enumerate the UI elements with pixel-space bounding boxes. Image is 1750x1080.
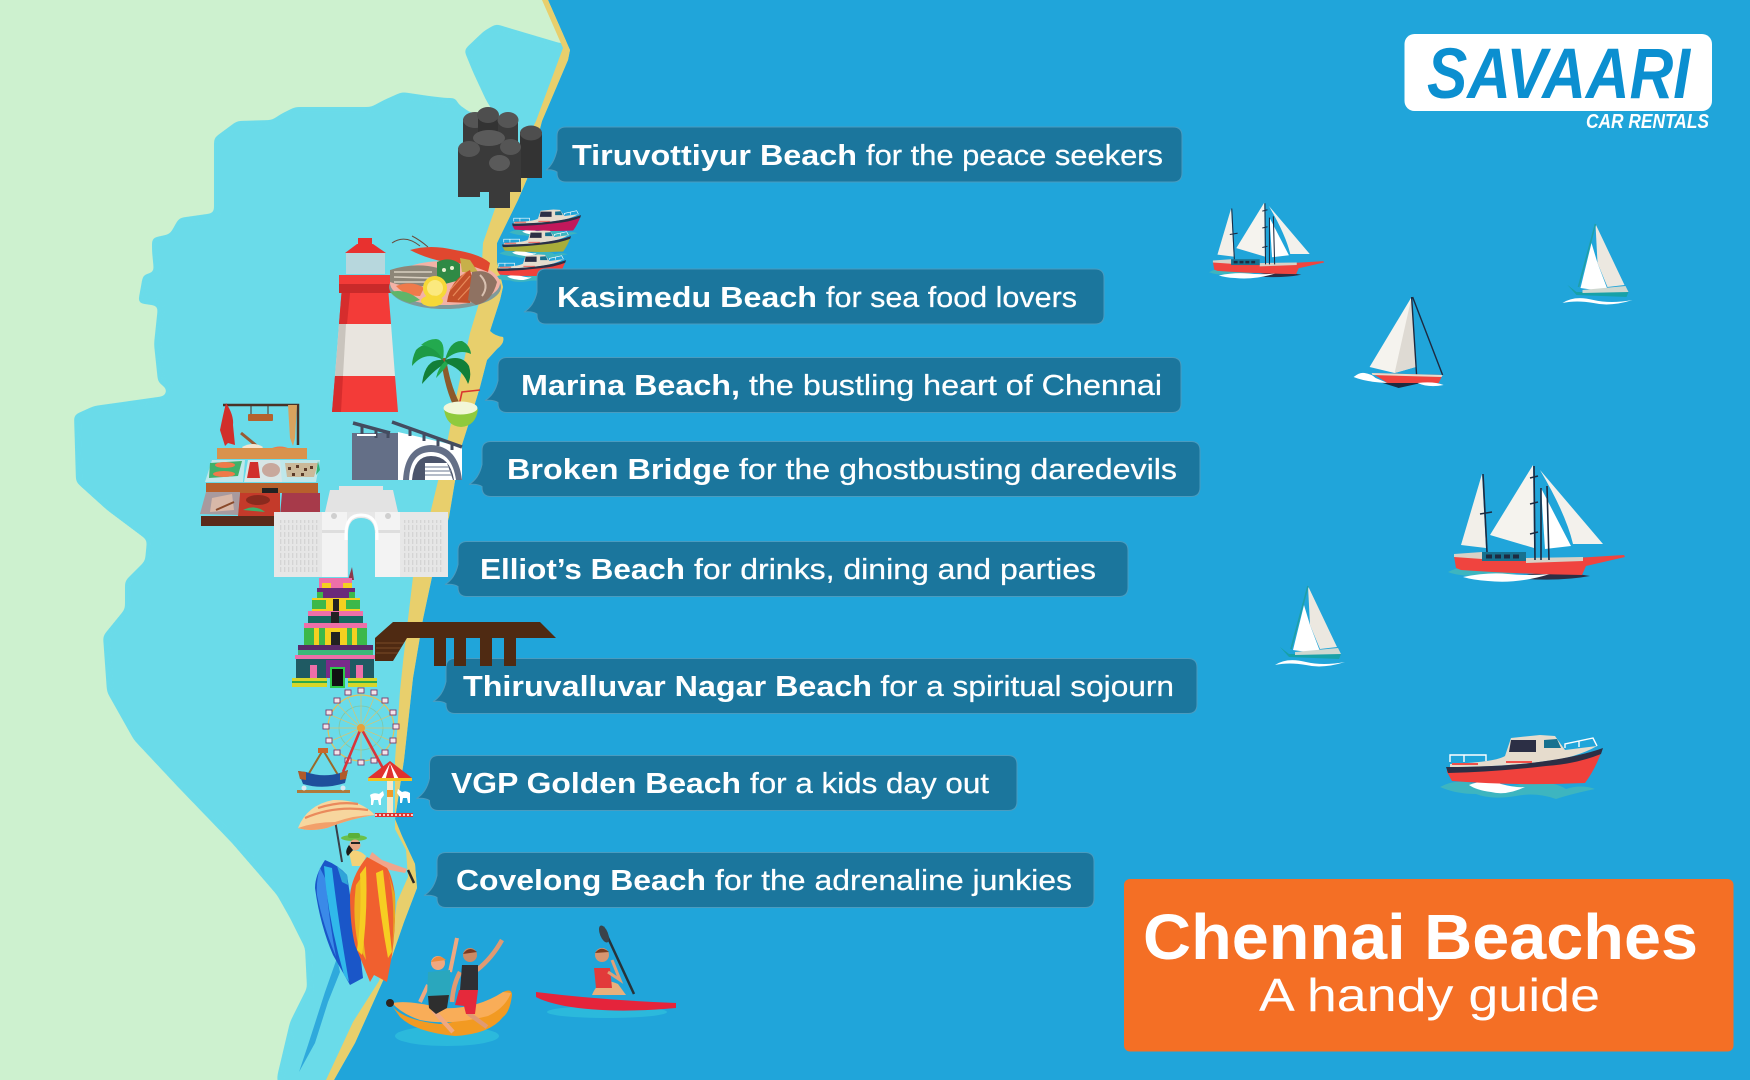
heading: Chennai Beaches xyxy=(1143,901,1698,973)
logo: Savaari car rentals: SAVAARI xyxy=(1427,35,1691,114)
callouts xyxy=(416,127,1200,908)
map: inland water sliver xyxy=(299,958,340,1072)
label: Broken Bridge: Broken Bridge xyxy=(507,454,730,486)
icon: broken bridge xyxy=(352,422,462,480)
title panel xyxy=(1124,879,1734,1052)
map: land xyxy=(0,0,575,1080)
icon: pirate ship ride xyxy=(297,748,350,793)
label: VGP Golden Beach: VGP Golden Beach xyxy=(451,768,741,800)
icon: sailing boat top xyxy=(1209,203,1324,278)
icon: three fishing boats xyxy=(494,209,581,283)
label: Marina Beach: the bustling heart of Chennai xyxy=(749,370,1162,402)
icon: surfboards xyxy=(315,857,395,985)
label: Thiruvalluvar Nagar Beach: for a spiritual sojourn xyxy=(880,671,1174,703)
label: Tiruvottiyur Beach: Tiruvottiyur Beach xyxy=(572,140,857,172)
icon: wooden pier xyxy=(375,622,556,666)
icon: sloop top right xyxy=(1562,224,1632,304)
label: Tiruvottiyur Beach xyxy=(546,127,1182,182)
icon: carousel xyxy=(368,761,413,817)
label: Elliot's Beach: for drinks, dining and parties xyxy=(694,554,1096,586)
label: Marina Beach xyxy=(485,358,1181,412)
label: Elliot's Beach: Elliot’s Beach xyxy=(480,554,685,586)
label: Covelong Beach: for the adrenaline junkies xyxy=(715,865,1072,897)
label: Kasimedu Beach xyxy=(524,269,1104,324)
logo: Savaari car rentals: CAR RENTALS xyxy=(1586,111,1710,133)
icon: motor boat xyxy=(1440,735,1603,799)
icon: sloop middle xyxy=(1275,586,1345,666)
label: Kasimedu Beach: Kasimedu Beach xyxy=(557,282,817,314)
icon: coconut drink xyxy=(444,390,480,427)
label: Broken Bridge: for the ghostbusting daredevils xyxy=(739,454,1177,486)
icon: basalt rock columns xyxy=(458,107,542,208)
icon: large ketch xyxy=(1448,465,1625,582)
icon: kayaker xyxy=(536,924,676,1018)
subheading: A handy guide xyxy=(1259,969,1600,1021)
icon: banana boat riders xyxy=(386,938,512,1046)
icon: seafood platter xyxy=(389,236,501,309)
label: VGP Golden Beach: for a kids day out xyxy=(750,768,989,800)
label: Thiruvalluvar Nagar Beach xyxy=(433,658,1197,714)
label: Tiruvottiyur Beach: for the peace seekers xyxy=(866,140,1163,172)
label: Elliot's Beach xyxy=(445,542,1128,596)
label: Marina Beach: Marina Beach, xyxy=(521,370,740,402)
logo: Savaari car rentals xyxy=(1404,34,1712,133)
icon: sunbather under umbrella xyxy=(298,800,414,883)
label: Covelong Beach: Covelong Beach xyxy=(456,865,706,897)
icon: lighthouse xyxy=(332,238,398,412)
label: Broken Bridge xyxy=(469,442,1200,496)
label: Covelong Beach xyxy=(424,852,1094,908)
icon: palm tree xyxy=(412,339,471,405)
map: backwater coast xyxy=(74,24,600,1080)
icon: ferris wheel xyxy=(323,688,399,772)
icon: fish stall xyxy=(200,403,320,526)
label: VGP Golden Beach xyxy=(416,756,1017,810)
label: Thiruvalluvar Nagar Beach: Thiruvalluvar Nagar Beach xyxy=(463,671,872,703)
icon: temple gopuram xyxy=(292,567,377,687)
label: Kasimedu Beach: for sea food lovers xyxy=(826,282,1077,314)
icon: white memorial gate xyxy=(274,486,448,577)
map: sandy shoreline xyxy=(326,0,570,1080)
icon: red sailboat xyxy=(1354,297,1444,388)
